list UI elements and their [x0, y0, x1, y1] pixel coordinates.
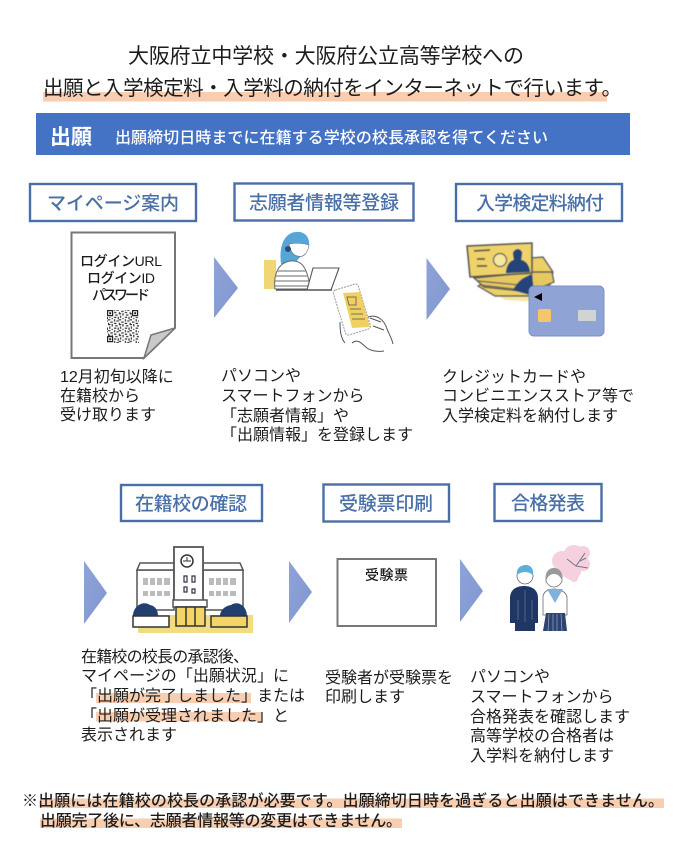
- icon: students and cherry blossoms: [510, 545, 590, 631]
- text: 在籍校の確認 description: 在籍校の校長の承認後、: [81, 648, 249, 666]
- text: 入学検定料納付 description: コンビニエンスストア等で: [442, 387, 634, 405]
- text: 受験票印刷 description: 印刷します: [325, 688, 405, 706]
- heading: 在籍校の確認: [121, 485, 262, 521]
- icon: exam ticket: [338, 559, 436, 626]
- text: 志願者情報等登録 description: 「出願情報」を登録します: [221, 426, 413, 444]
- heading: 志願者情報等登録: 志願者情報等登録: [249, 192, 399, 214]
- title: 出願と入学検定料・入学料の納付をインターネットで行います。: [43, 77, 622, 100]
- text: マイページ案内 description: 受け取ります: [60, 406, 156, 424]
- footer note: [22, 791, 664, 830]
- step: 受験票印刷: [324, 484, 453, 706]
- text: 受験票印刷 description: [325, 669, 453, 706]
- icon: person with laptop and smartphone: [264, 232, 393, 351]
- icon: QR code: [107, 310, 139, 343]
- icon: login document: ログインURL: [80, 253, 162, 269]
- text: 合格発表 description: 高等学校の合格者は: [470, 727, 614, 745]
- heading: 志願者情報等登録: [234, 184, 414, 220]
- arrow: [214, 257, 238, 318]
- icon: login document: [72, 232, 175, 358]
- heading: 在籍校の確認: 在籍校の確認: [135, 493, 247, 515]
- heading: 受験票印刷: 受験票印刷: [339, 493, 433, 515]
- heading: 入学検定料納付: 入学検定料納付: [476, 192, 604, 214]
- text: 在籍校の確認 description: [81, 648, 305, 744]
- header band: 出願: 出願締切日時までに在籍する学校の校長承認を得てください: [115, 129, 548, 147]
- text: 入学検定料納付 description: 入学検定料を納付します: [442, 407, 618, 425]
- text: 入学検定料納付 description: クレジットカードや: [442, 368, 586, 386]
- text: 志願者情報等登録 description: パソコンや: [221, 367, 301, 385]
- header band: 出願: 出願: [50, 126, 92, 149]
- heading: マイページ案内: マイページ案内: [47, 192, 179, 214]
- text: 合格発表 description: 入学料を納付します: [470, 747, 614, 765]
- text: 在籍校の確認 description: 「出願が完了しました」または: [81, 687, 305, 705]
- icon: credit card: [529, 286, 604, 336]
- text: マイページ案内 description: 12月初旬以降に: [60, 368, 174, 386]
- text: 志願者情報等登録 description: スマートフォンから: [221, 388, 365, 405]
- text: 入学検定料納付 description: [442, 368, 634, 425]
- icon: login document: パスワード: [92, 287, 150, 303]
- header band: 出願: [36, 113, 630, 155]
- icon: banknotes: [467, 243, 556, 302]
- text: 合格発表 description: [470, 668, 630, 765]
- heading: 合格発表: 合格発表: [511, 492, 585, 514]
- icon: exam ticket: 受験票: [365, 567, 408, 583]
- step: 入学検定料納付: [442, 184, 634, 425]
- text: 合格発表 description: パソコンや: [470, 668, 550, 686]
- step: 在籍校の確認: [81, 485, 305, 744]
- footer note: 出願完了後に、志願者情報等の変更はできません。: [40, 812, 402, 830]
- text: マイページ案内 description: [60, 368, 174, 424]
- heading: 入学検定料納付: [456, 184, 622, 221]
- heading: マイページ案内: [30, 184, 196, 221]
- footer note: ※出願には在籍校の校長の承認が必要です。出願締切日時を過ぎると出願はできません。: [22, 791, 664, 810]
- text: 在籍校の確認 description: マイページの「出願状況」に: [81, 667, 289, 685]
- text: 在籍校の確認 description: 「出願が受理されました」と: [81, 707, 289, 725]
- text: 合格発表 description: スマートフォンから: [470, 689, 614, 706]
- icon: login document: ログインID: [87, 270, 155, 286]
- icon: school building: [133, 547, 253, 633]
- text: マイページ案内 description: 在籍校から: [60, 387, 140, 405]
- text: 在籍校の確認 description: 表示されます: [81, 726, 177, 744]
- text: 受験票印刷 description: 受験者が受験票を: [325, 669, 453, 687]
- text: 志願者情報等登録 description: 「志願者情報」や: [221, 407, 349, 425]
- arrow: [460, 559, 483, 622]
- heading: 受験票印刷: [324, 484, 449, 522]
- title: 大阪府立中学校・大阪府公立高等学校への: [128, 45, 524, 68]
- arrow: [426, 258, 450, 320]
- heading: 合格発表: [494, 484, 602, 521]
- highlight: 出願が完了しました / 出願が受理されました: [96, 693, 262, 722]
- step: マイページ案内: [30, 184, 196, 424]
- title: [43, 45, 622, 102]
- arrow: [84, 561, 107, 624]
- text: 志願者情報等登録 description: [221, 367, 413, 444]
- step: 合格発表: [470, 484, 630, 765]
- step: 志願者情報等登録: [221, 184, 414, 444]
- arrow: [289, 561, 312, 623]
- text: 合格発表 description: 合格発表を確認します: [470, 708, 630, 726]
